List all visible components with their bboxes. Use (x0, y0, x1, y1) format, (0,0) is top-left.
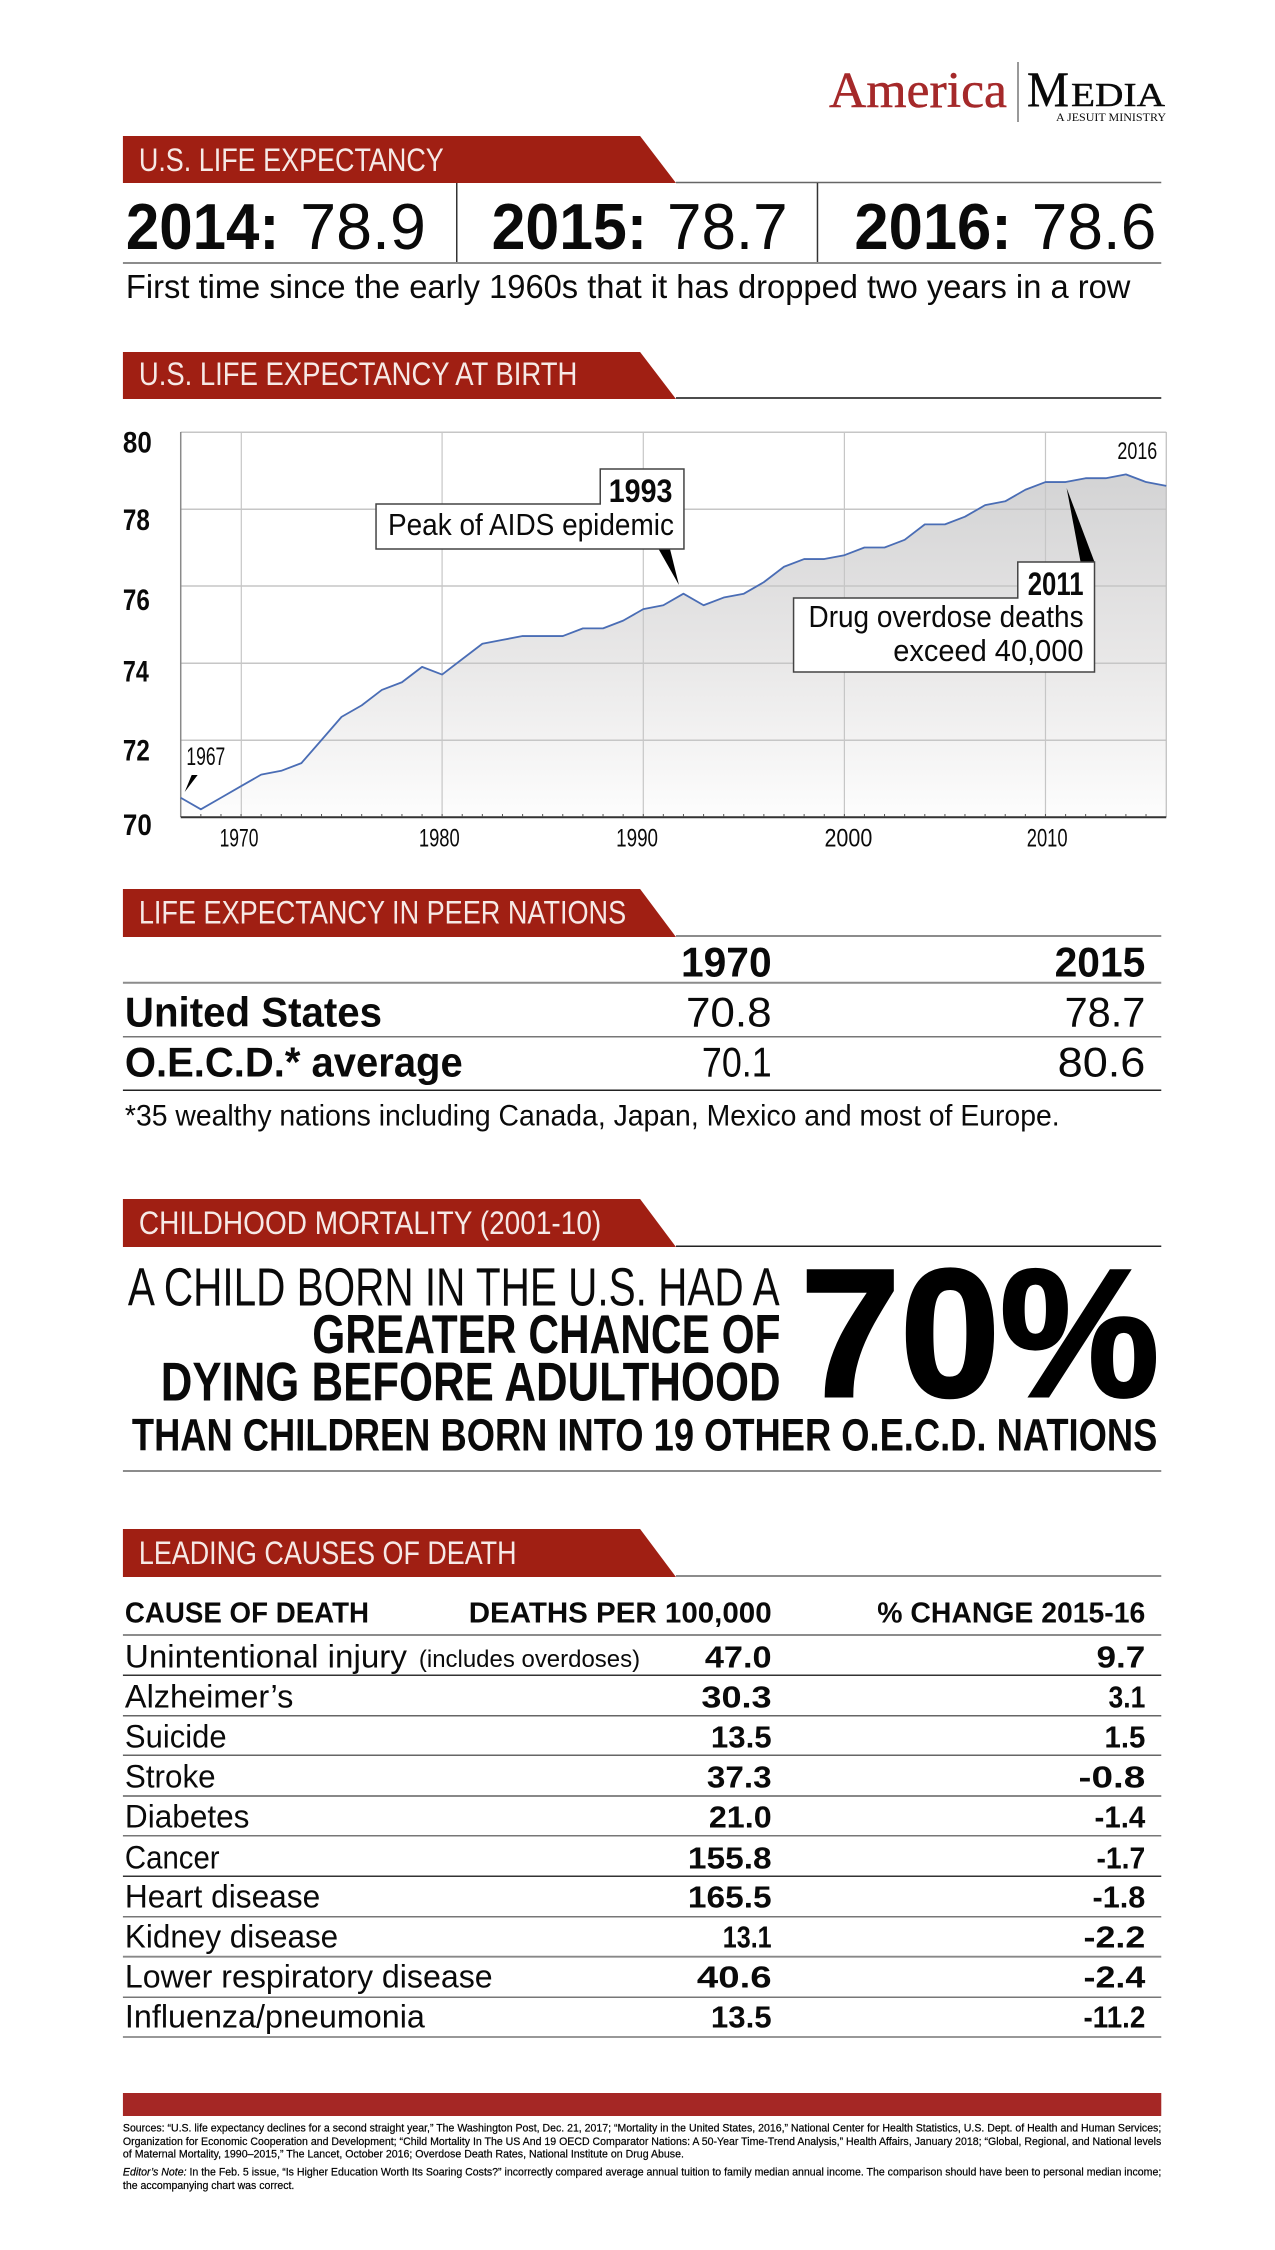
row: stroke (125, 1758, 1145, 1794)
panel: leading causes of death (123, 1529, 1161, 2037)
row: Alzheimer's: 3.1 (1108, 1679, 1145, 1714)
row: unintentional injury: 47.0 (705, 1639, 772, 1674)
stat: 2014 (126, 190, 426, 263)
row: Alzheimer's: Alzheimer’s (125, 1678, 293, 1714)
row: cancer: Cancer (125, 1839, 220, 1875)
row: OECD average: O.E.C.D.* average (125, 1039, 463, 1086)
row: influenza/pneumonia: Influenza/pneumonia (125, 1999, 425, 2035)
table column headers (125, 1597, 1145, 1629)
row: suicide: 1.5 (1104, 1719, 1145, 1754)
row: diabetes: Diabetes (125, 1799, 249, 1835)
stat: 2015: 78.7 (667, 190, 788, 263)
row: Alzheimer's (125, 1678, 1145, 1714)
table column headers: DEATHS PER 100,000 (469, 1597, 772, 1629)
row: heart disease: -1.8 (1093, 1880, 1145, 1915)
row: unintentional injury (125, 1638, 1145, 1674)
heading banner: leading causes of death (123, 1529, 676, 1577)
x axis labels (220, 825, 1068, 853)
logo: America Media: EDIA (1071, 77, 1166, 114)
heading banner: peer nations (123, 889, 676, 937)
logo: America Media: A JESUIT MINISTRY (1056, 110, 1166, 124)
y axis labels: 76 (123, 584, 150, 617)
heading banner: childhood mortality: CHILDHOOD MORTALITY (2001-10) (139, 1205, 601, 1241)
y axis labels: 78 (123, 504, 150, 537)
sources and editor's note: Editor’s Note: In the Feb. 5 issue, “Is Higher Education Worth Its Soaring Costs?” incorrectly compared average annual tuition to family median annual income. The comparison should have been to personal median income; (123, 2167, 1161, 2179)
panel: life expectancy in peer nations (123, 889, 1161, 1133)
y axis labels: 70 (123, 809, 152, 842)
stat: 2016 (854, 190, 1156, 263)
stat: 2015: 2015: (492, 190, 647, 263)
logo: America Media (829, 61, 1166, 124)
heading banner: life expectancy at birth: U.S. LIFE EXPECTANCY AT BIRTH (139, 356, 577, 392)
row: kidney disease: -2.2 (1084, 1920, 1145, 1955)
label: 2016: 2016 (1117, 438, 1157, 465)
table column headers: % CHANGE 2015-16 (877, 1597, 1145, 1629)
row: OECD average (125, 1039, 1145, 1086)
row: heart disease (125, 1879, 1145, 1915)
footer red bar (123, 2093, 1161, 2116)
row: United States (125, 989, 1145, 1036)
callout: 1993 peak of AIDS epidemic: Peak of AIDS epidemic (388, 507, 674, 542)
x axis labels: 1990 (616, 825, 658, 853)
row: cancer: -1.7 (1097, 1840, 1145, 1875)
big stat: 70%: 70% (801, 1232, 1159, 1435)
annotation: 1967 with pointer: 1967 (186, 743, 225, 771)
row: diabetes (125, 1799, 1146, 1835)
row: influenza/pneumonia (125, 1999, 1145, 2035)
callout: 2011 drug overdose deaths: 2011 (1028, 566, 1084, 602)
row: diabetes: 21.0 (709, 1800, 772, 1835)
row: stroke: 37.3 (707, 1759, 772, 1794)
y axis labels: 74 (123, 656, 149, 689)
y axis labels (123, 426, 152, 842)
stat: 2014: 78.9 (300, 190, 426, 263)
panel: U.S. life expectancy (123, 136, 1161, 305)
row: kidney disease: Kidney disease (125, 1919, 338, 1955)
row: kidney disease (125, 1919, 1145, 1955)
table header years: 1970 (681, 939, 772, 986)
row: stroke: Stroke (125, 1758, 216, 1794)
row: OECD average: 70.1 (702, 1039, 772, 1086)
row: heart disease: Heart disease (125, 1879, 320, 1915)
sources and editor's note: Organization for Economic Cooperation and Development; “Child Mortality In The US And 19 OECD Comparator Nations: A 50-Year Time-Trend Analysis,” Health Affairs, January 2018; “Global, Regional, and National levels (123, 2136, 1162, 2148)
row: lower respiratory disease: 40.6 (697, 1960, 772, 1995)
heading banner: U.S. life expectancy (123, 136, 676, 183)
sources and editor's note: the accompanying chart was correct. (123, 2180, 294, 2192)
row: unintentional injury: 9.7 (1097, 1639, 1145, 1674)
logo: America Media: America (829, 63, 1007, 119)
callout: 1993 peak of AIDS epidemic: 1993 (609, 473, 672, 509)
panel: life expectancy at birth chart (123, 352, 1166, 853)
row: United States: United States (125, 989, 382, 1036)
row: lower respiratory disease: -2.4 (1084, 1960, 1146, 1995)
x axis labels: 2010 (1027, 825, 1068, 853)
stat: 2016: 78.6 (1032, 190, 1156, 263)
statement text (128, 1258, 1157, 1461)
line chart: life expectancy 1967-2016 (181, 432, 1166, 817)
y axis labels: 80 (123, 426, 152, 459)
row: Alzheimer's: 30.3 (701, 1679, 772, 1714)
row: diabetes: -1.4 (1095, 1800, 1146, 1835)
stat: 2015 (492, 190, 788, 263)
heading banner: leading causes of death: LEADING CAUSES OF DEATH (139, 1535, 517, 1571)
table column headers: CAUSE OF DEATH (125, 1597, 369, 1629)
row: stroke: -0.8 (1079, 1759, 1145, 1794)
y axis labels: 72 (123, 735, 150, 768)
table header years (681, 939, 1145, 986)
row: suicide: 13.5 (711, 1719, 772, 1754)
x axis labels: 1970 (220, 825, 258, 853)
stat: 2014: 2014: (126, 190, 279, 263)
heading banner: U.S. life expectancy: U.S. LIFE EXPECTANCY (139, 142, 444, 178)
x axis labels: 1980 (419, 825, 460, 853)
subtitle text: First time since the early 1960s that it has dropped two years in a row (126, 268, 1131, 305)
sources and editor's note (123, 2123, 1162, 2192)
panel: childhood mortality (123, 1199, 1161, 1471)
statement text: DYING BEFORE ADULTHOOD (161, 1351, 781, 1413)
row: United States: 70.8 (686, 989, 772, 1036)
row: suicide (125, 1718, 1145, 1754)
row: unintentional injury: Unintentional injury (125, 1638, 407, 1674)
x axis labels: 2000 (824, 825, 872, 853)
row: kidney disease: 13.1 (723, 1920, 772, 1955)
sources and editor's note: of Maternal Mortality, 1990–2015,” The Lancet, October 2016; Overdose Death Rates, National Institute on Drug Abuse. (123, 2149, 684, 2161)
statement text: GREATER CHANCE OF (312, 1303, 781, 1365)
row: heart disease: 165.5 (688, 1880, 772, 1915)
heading banner: peer nations: LIFE EXPECTANCY IN PEER NATIONS (139, 894, 626, 930)
row: suicide: Suicide (125, 1718, 227, 1754)
row: influenza/pneumonia: -11.2 (1084, 2000, 1145, 2035)
row: lower respiratory disease: Lower respiratory disease (125, 1959, 493, 1995)
row: lower respiratory disease (125, 1959, 1146, 1995)
row: unintentional injury: (includes overdoses) (419, 1646, 640, 1673)
sources and editor's note: Sources: “U.S. life expectancy declines for a second straight year,” The Washington Post, Dec. 21, 2017; “Mortality in the United States, 2016,” National Center for Health Statistics, U.S. Dept. of Health and Human Services; (123, 2123, 1161, 2135)
callout: 2011 drug overdose deaths: exceed 40,000 (893, 633, 1084, 668)
footnote: *35 wealthy nations including Canada, Japan, Mexico and most of Europe. (125, 1100, 1060, 1133)
stat: 2016: 2016: (854, 190, 1012, 263)
row: cancer: 155.8 (688, 1840, 772, 1875)
statement text: A CHILD BORN IN THE U.S. HAD A (128, 1258, 780, 1318)
callout: 1993 peak of AIDS epidemic (376, 469, 684, 585)
annotation: 1967 with pointer (185, 743, 225, 792)
row: OECD average: 80.6 (1058, 1039, 1145, 1086)
row: influenza/pneumonia: 13.5 (711, 2000, 772, 2035)
row: cancer (125, 1839, 1145, 1875)
callout: 2011 drug overdose deaths (794, 488, 1095, 672)
callout: 2011 drug overdose deaths: Drug overdose deaths (809, 599, 1084, 634)
row: United States: 78.7 (1065, 989, 1145, 1036)
table header years: 2015 (1055, 939, 1145, 986)
logo: America Media: M (1027, 61, 1069, 117)
